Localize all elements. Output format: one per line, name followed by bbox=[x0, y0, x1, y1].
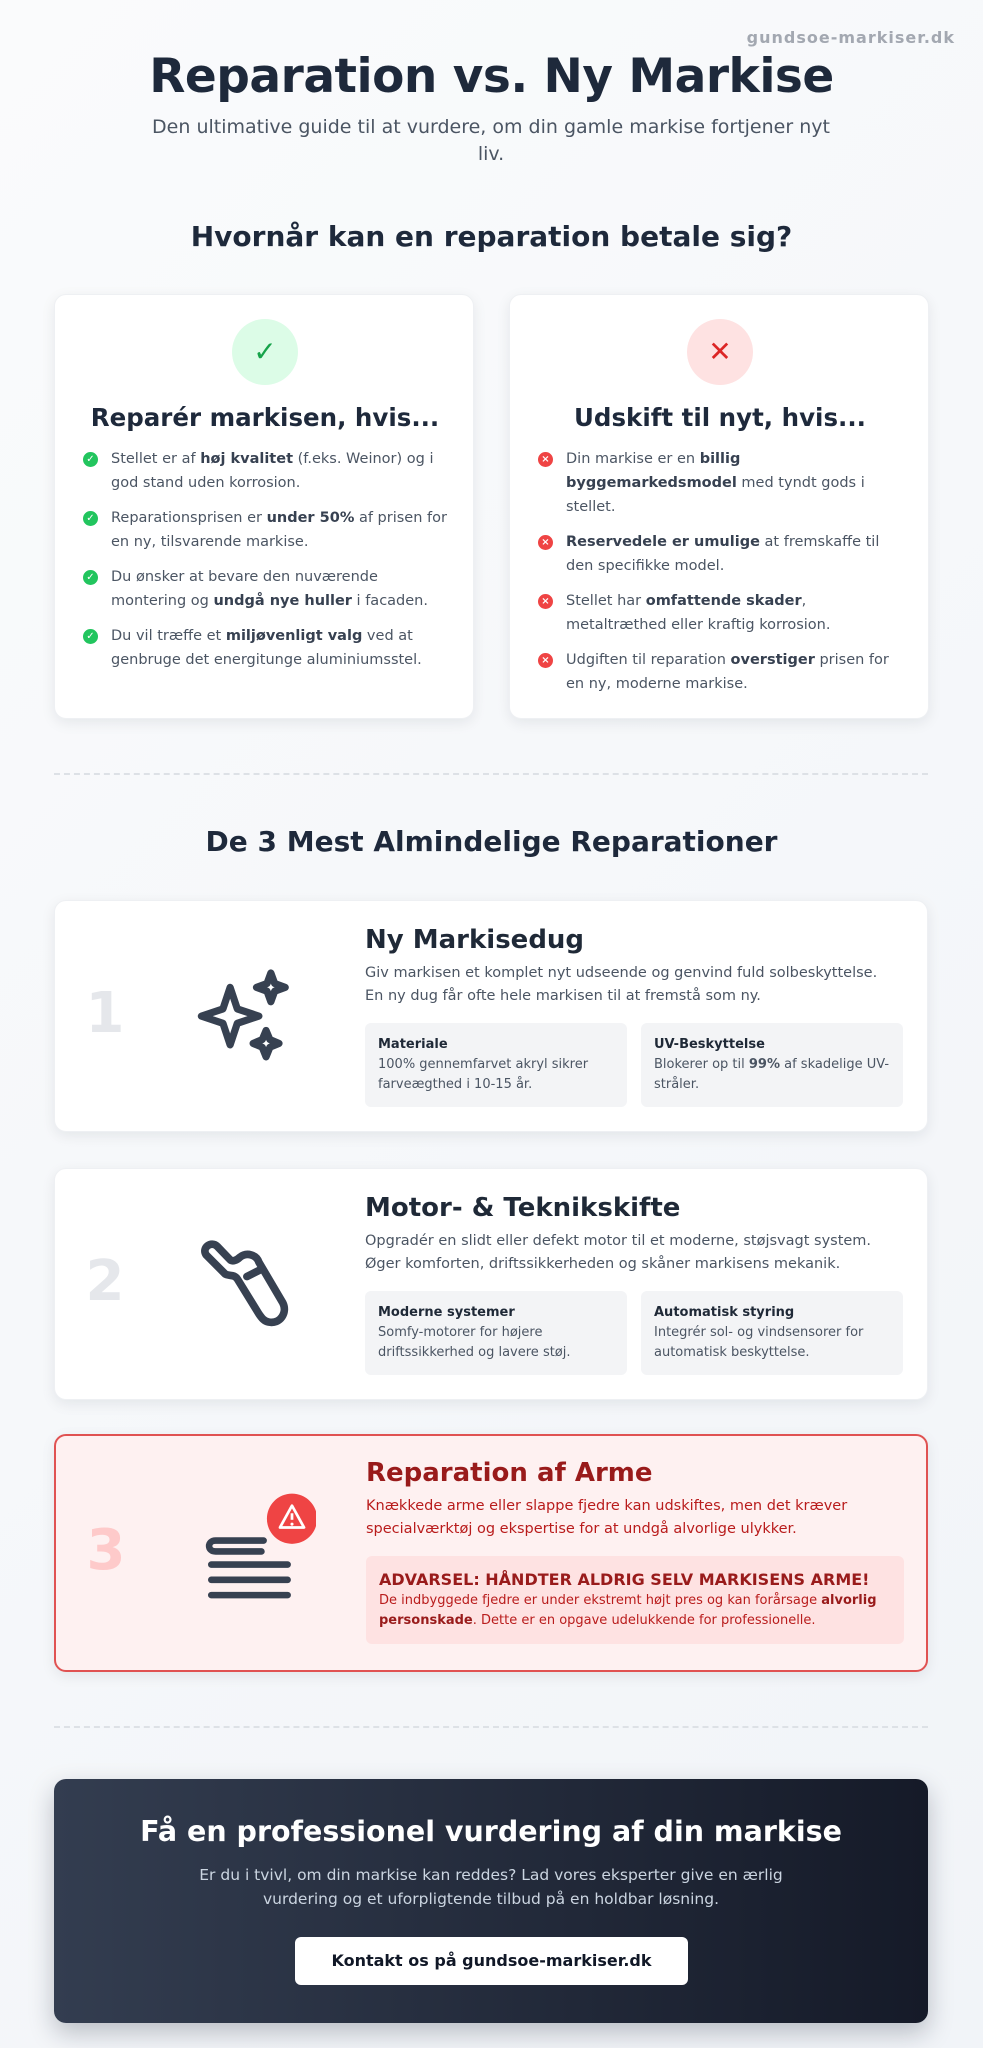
heading: replace if: Udskift til nyt, hvis... bbox=[574, 403, 866, 432]
cta button: Kontakt os på gundsoe-markiser.dk bbox=[331, 1951, 652, 1970]
list: repair reasons bbox=[83, 451, 447, 668]
box: modern systems bbox=[365, 1291, 627, 1375]
box: automation bbox=[641, 1291, 903, 1375]
box: material bbox=[365, 1023, 627, 1107]
list: replace reasons: × bbox=[541, 537, 550, 548]
icon: wrench bbox=[201, 1240, 288, 1326]
list: replace reasons: Stellet har omfattende skader, metaltræthed eller kraftig korrosion. bbox=[566, 593, 830, 633]
icon: arms with warning bbox=[206, 1494, 316, 1598]
icon: cross bbox=[687, 319, 753, 385]
box: material: 100% gennemfarvet akryl sikrer farveægthed i 10-15 år. bbox=[378, 1057, 588, 1092]
icon: sparkles bbox=[198, 969, 289, 1060]
number 1: 1 bbox=[86, 981, 124, 1046]
warning box: De indbyggede fjedre er under ekstremt højt pres og kan forårsage alvorlig personskade. Dette er en opgave udelukkende for professionelle. bbox=[379, 1593, 877, 1628]
list: replace reasons: × bbox=[541, 655, 550, 666]
title: Reparation af Arme bbox=[366, 1458, 653, 1488]
list: repair reasons: ✓ bbox=[86, 454, 95, 465]
heading: top 3 repairs: De 3 Mest Almindelige Reparationer bbox=[206, 825, 778, 858]
title: Motor- & Teknikskifte bbox=[365, 1193, 680, 1223]
box: automation: Integrér sol- og vindsensorer for automatisk beskyttelse. bbox=[654, 1325, 863, 1360]
box: uv: Blokerer op til 99% af skadelige UV-stråler. bbox=[654, 1057, 889, 1092]
panel: repair bbox=[54, 294, 474, 719]
list: replace reasons: Reservedele er umulige at fremskaffe til den specifikke model. bbox=[566, 534, 879, 574]
box: automation: Automatisk styring bbox=[654, 1305, 794, 1320]
cta heading: Få en professionel vurdering af din markise bbox=[140, 1815, 842, 1848]
list: repair reasons: Du ønsker at bevare den nuværende montering og undgå nye huller i facaden. bbox=[111, 569, 428, 609]
heading: repair if: Reparér markisen, hvis... bbox=[91, 403, 439, 432]
watermark: gundsoe-markiser.dk bbox=[747, 28, 955, 47]
list: repair reasons: ✓ bbox=[86, 513, 95, 524]
box: material: Materiale bbox=[378, 1037, 448, 1052]
description: Knækkede arme eller slappe fjedre kan udskiftes, men det kræver specialværktøj og ekspertise for at undgå alvorlige ulykker. bbox=[366, 1498, 847, 1537]
list: replace reasons: Udgiften til reparation overstiger prisen for en ny, moderne markise. bbox=[566, 652, 889, 692]
title: Reparation vs. Ny Markise bbox=[149, 49, 834, 104]
icon: cross: ✕ bbox=[708, 335, 732, 368]
cta button bbox=[295, 1937, 688, 1985]
list: repair reasons: Stellet er af høj kvalitet (f.eks. Weinor) og i god stand uden korrosion. bbox=[111, 451, 433, 491]
panel: replace bbox=[509, 294, 929, 719]
cta text: Er du i tvivl, om din markise kan reddes? Lad vores eksperter give en ærlig vurdering og et uforpligtende tilbud på en holdbar løsning. bbox=[199, 1866, 783, 1908]
panel: repair 1 bbox=[54, 900, 928, 1132]
box: modern systems: Somfy-motorer for højere driftssikkerhed og lavere støj. bbox=[378, 1325, 571, 1360]
heading: when repair pays: Hvornår kan en reparation betale sig? bbox=[191, 220, 792, 253]
description: Giv markisen et komplet nyt udseende og genvind fuld solbeskyttelse. En ny dug får ofte hele markisen til at fremstå som ny. bbox=[365, 965, 877, 1004]
list: replace reasons: × bbox=[541, 596, 550, 607]
panel: repair 3 warning bbox=[54, 1434, 928, 1672]
box: uv bbox=[641, 1023, 903, 1107]
number 2: 2 bbox=[86, 1249, 124, 1314]
title: Ny Markisedug bbox=[365, 925, 584, 955]
subtitle: Den ultimative guide til at vurdere, om din gamle markise fortjener nyt liv. bbox=[152, 116, 830, 165]
list: replace reasons: × bbox=[541, 454, 550, 465]
description: Opgradér en slidt eller defekt motor til et moderne, støjsvagt system. Øger komforten, driftssikkerheden og skåner markisens mekanik. bbox=[365, 1233, 871, 1272]
panel: repair 2 bbox=[54, 1168, 928, 1400]
list: repair reasons: Du vil træffe et miljøvenligt valg ved at genbruge det energitunge aluminiumsstel. bbox=[111, 628, 422, 668]
icon: check bbox=[232, 319, 298, 385]
list: repair reasons: ✓ bbox=[86, 631, 95, 642]
box: uv: UV-Beskyttelse bbox=[654, 1037, 765, 1052]
number 3: 3 bbox=[87, 1518, 125, 1583]
warning box: ADVARSEL: HÅNDTER ALDRIG SELV MARKISENS ARME! bbox=[379, 1570, 869, 1589]
cta panel bbox=[54, 1779, 928, 2023]
warning box bbox=[366, 1556, 904, 1644]
list: replace reasons bbox=[538, 451, 889, 692]
icon: check: ✓ bbox=[253, 335, 277, 368]
list: repair reasons: ✓ bbox=[86, 572, 95, 583]
box: modern systems: Moderne systemer bbox=[378, 1305, 515, 1320]
list: replace reasons: Din markise er en billig byggemarkedsmodel med tyndt gods i stellet. bbox=[566, 451, 865, 515]
list: repair reasons: Reparationsprisen er under 50% af prisen for en ny, tilsvarende markise. bbox=[111, 510, 447, 550]
